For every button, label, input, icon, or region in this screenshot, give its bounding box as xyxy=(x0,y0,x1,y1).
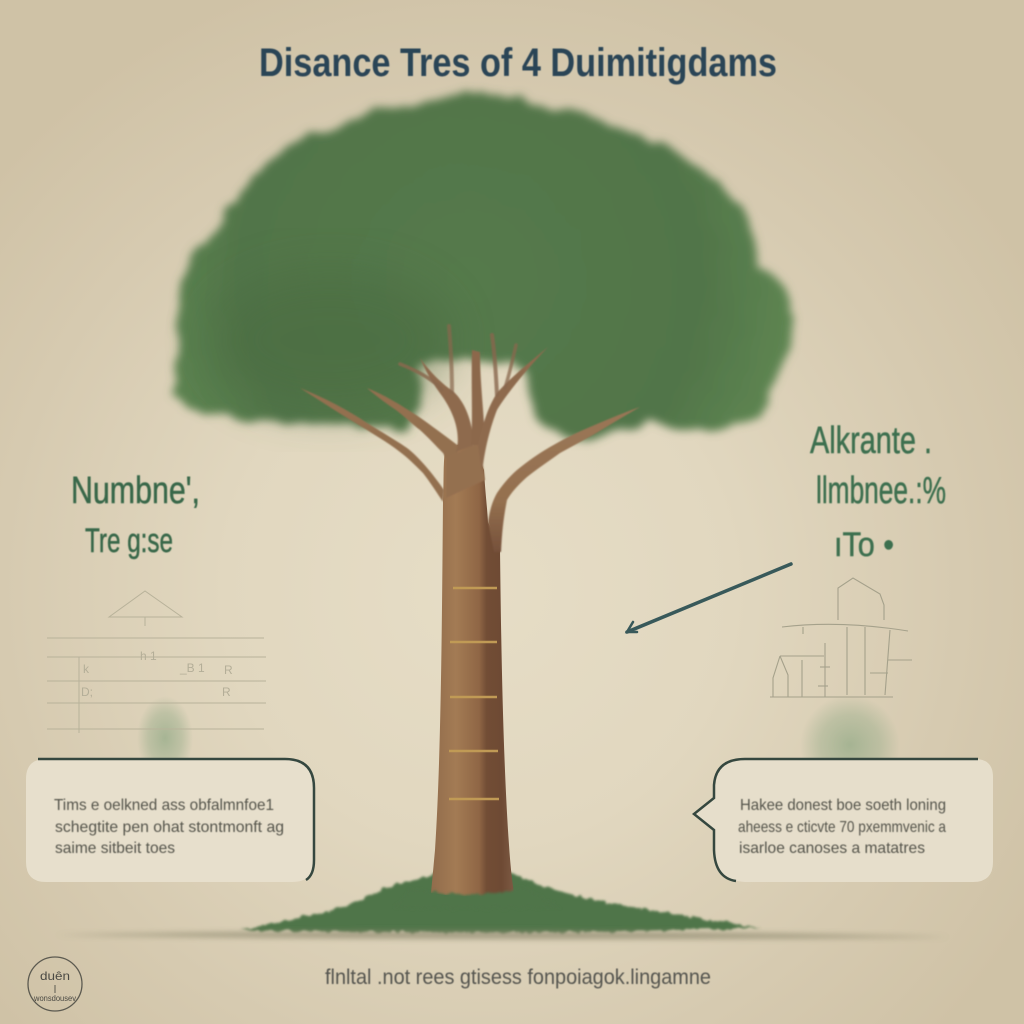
right heading: Alkrante . xyxy=(810,420,932,462)
left heading: Tre g:se xyxy=(85,522,173,560)
left callout text xyxy=(54,797,284,857)
left branch xyxy=(300,388,444,502)
left heading xyxy=(71,470,200,560)
left fork arm xyxy=(420,358,474,452)
left sketch diagram: D; xyxy=(81,685,93,699)
right branch xyxy=(488,407,640,552)
left callout xyxy=(26,759,314,882)
right heading xyxy=(810,420,946,564)
arrow pointing to trunk xyxy=(627,564,791,632)
ground shadow xyxy=(55,931,950,939)
tree illustration xyxy=(55,94,950,939)
logo badge xyxy=(28,957,82,1011)
right callout xyxy=(694,759,993,882)
left callout text: saime sitbeit toes xyxy=(55,840,175,857)
main trunk xyxy=(431,440,514,896)
right callout text xyxy=(738,797,946,857)
right sketch diagram: building xyxy=(770,578,912,697)
inner left branch xyxy=(367,388,460,468)
title: Disance Tres of 4 Duimitigdams xyxy=(259,41,777,85)
right fork arm xyxy=(478,347,548,475)
logo badge: duên xyxy=(40,969,70,983)
left callout text: schegtite pen ohat stontmonft ag xyxy=(55,819,284,836)
left green glow xyxy=(137,696,193,780)
left sketch diagram: h 1 xyxy=(140,649,157,663)
centre fork body xyxy=(446,442,485,498)
right green glow xyxy=(800,695,900,795)
canopy shading xyxy=(210,270,450,410)
trunk rings xyxy=(449,588,499,799)
left sketch diagram: _B 1 xyxy=(179,661,205,675)
right callout text: Hakee donest boe soeth loning xyxy=(740,797,946,814)
left sketch diagram: k xyxy=(83,662,90,676)
logo badge: wonsdousev xyxy=(33,994,76,1003)
left callout text: Tims e oelkned ass obfalmnfoe1 xyxy=(54,797,274,814)
footer caption: flnltal .not rees gtisess fonpoiagok.lingamne xyxy=(325,966,711,989)
right callout text: aheess e cticvte 70 pxemmvenic a xyxy=(738,819,946,836)
left heading: Numbne', xyxy=(71,470,200,512)
left sketch diagram: R xyxy=(222,685,231,699)
right callout text: isarloe canoses a matatres xyxy=(739,840,925,857)
grassy mound xyxy=(240,870,760,933)
tree canopy xyxy=(172,94,792,437)
tree branches xyxy=(300,326,640,552)
left sketch diagram: R xyxy=(224,663,233,677)
right heading: ıTo • xyxy=(834,526,894,564)
grass over trunk base xyxy=(395,888,560,908)
right heading: llmbnee.:% xyxy=(816,470,946,512)
centre fork stem xyxy=(471,350,485,445)
fork stems xyxy=(400,326,516,395)
left sketch diagram xyxy=(47,591,266,733)
